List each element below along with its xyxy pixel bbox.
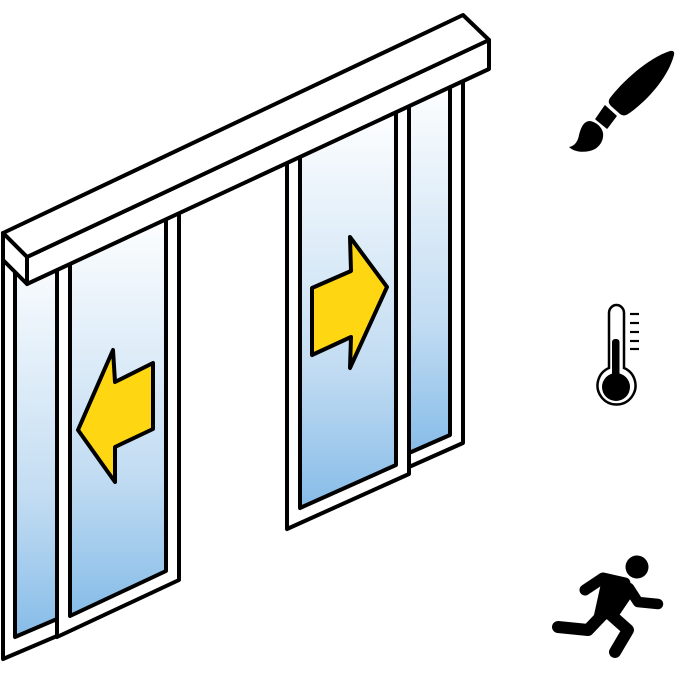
panel: left sliding door — [57, 205, 179, 637]
panel: right sliding door — [287, 100, 409, 529]
icon: running person — [558, 556, 658, 652]
thermometer scale ticks — [630, 314, 639, 349]
icon: thermometer — [598, 305, 639, 404]
arrow: right — [312, 237, 387, 368]
icon: paint brush — [569, 51, 674, 152]
header box — [3, 15, 489, 284]
panel: right fixed frame — [409, 75, 463, 467]
arrow: left — [78, 350, 153, 482]
door assembly — [3, 15, 489, 659]
panel: left fixed frame — [3, 240, 57, 659]
